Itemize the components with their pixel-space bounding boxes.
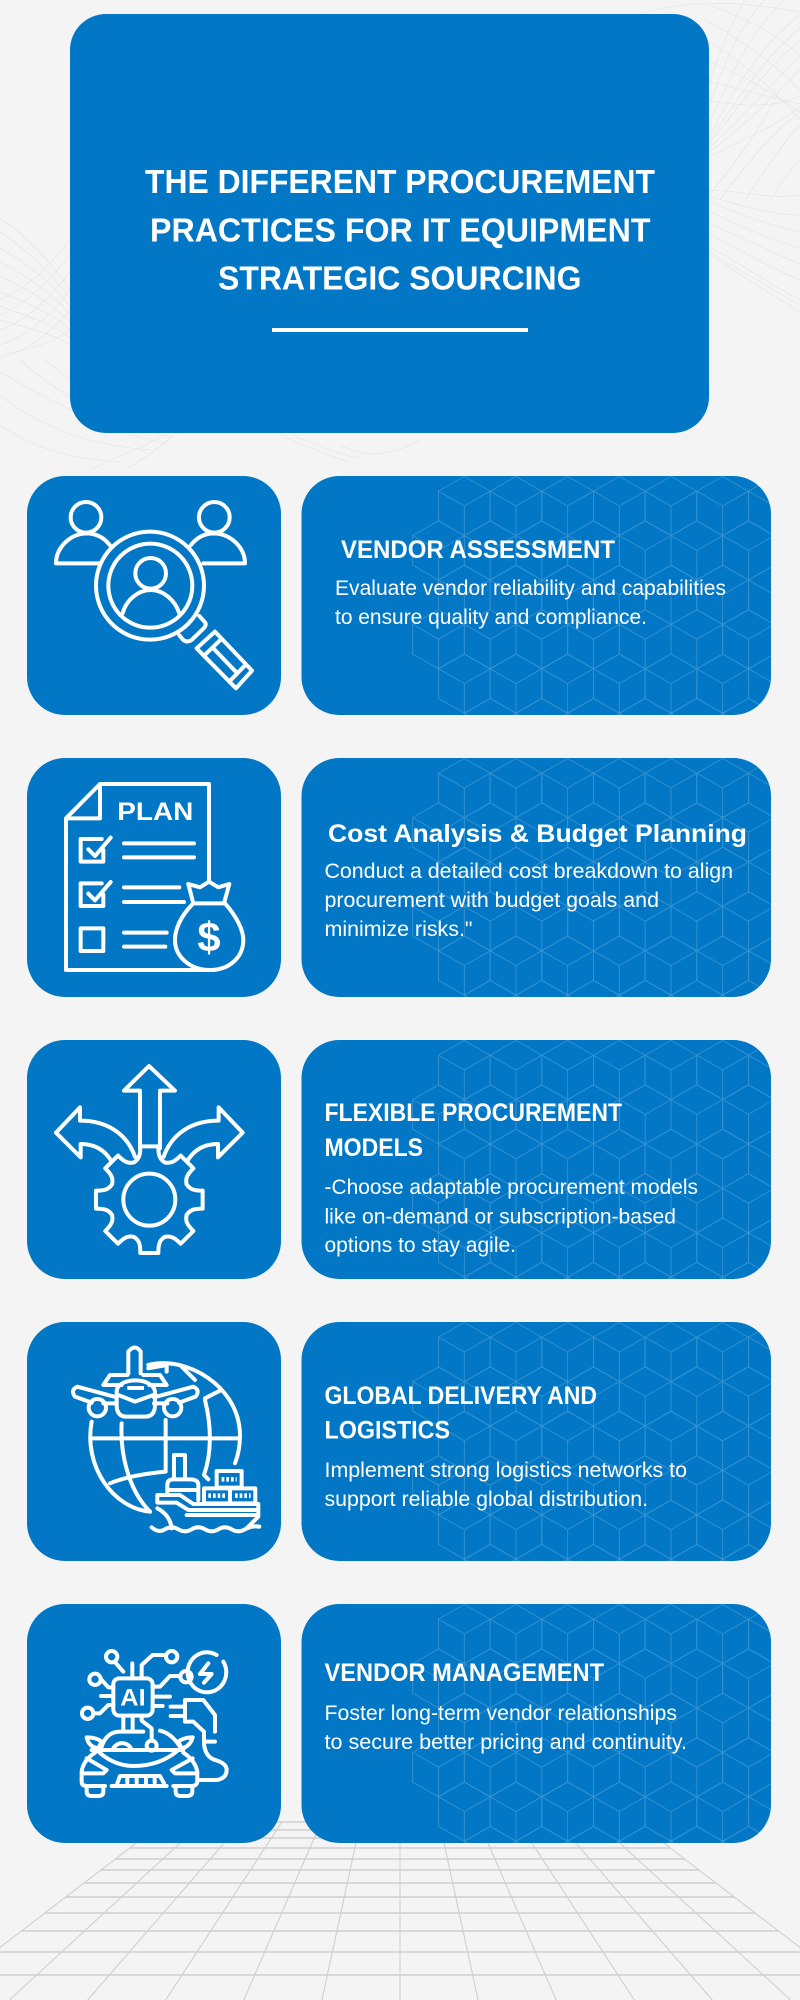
background wave pattern	[0, 0, 800, 470]
heading: flexible procurement models: MODELS	[324, 1134, 423, 1162]
icon: plan checklist with money bag: $	[197, 914, 221, 961]
text: vendor assessment description	[335, 577, 726, 629]
heading: flexible procurement models	[324, 1099, 622, 1162]
title: PRACTICES FOR IT EQUIPMENT	[150, 212, 650, 248]
title underline	[272, 328, 528, 332]
text: flexible procurement description: like on-demand or subscription-based	[324, 1206, 676, 1228]
perspective grid floor	[0, 1822, 800, 2000]
text: vendor assessment description: Evaluate vendor reliability and capabilities	[335, 577, 726, 600]
heading: global delivery and logistics: GLOBAL DELIVERY AND	[324, 1382, 597, 1410]
panel: flexible procurement icon card	[27, 1040, 281, 1279]
panel: vendor management text card	[302, 1604, 771, 1843]
panel: vendor assessment icon card	[27, 476, 281, 715]
text: vendor assessment description: to ensure quality and compliance.	[335, 606, 647, 629]
heading: global delivery and logistics	[324, 1382, 597, 1444]
text: cost analysis description	[324, 860, 733, 941]
text: flexible procurement description: -Choose adaptable procurement models	[324, 1176, 698, 1199]
panel: global delivery text card	[302, 1322, 771, 1561]
text: flexible procurement description	[324, 1176, 698, 1257]
panel: flexible procurement text card	[302, 1040, 771, 1279]
title: THE DIFFERENT PROCUREMENT	[145, 163, 655, 200]
text: global delivery description: support reliable global distribution.	[324, 1488, 648, 1511]
text: cost analysis description: Conduct a detailed cost breakdown to align	[324, 860, 733, 883]
panel: vendor management icon card	[27, 1604, 281, 1843]
text: cost analysis description: minimize risks."	[324, 918, 472, 941]
title: STRATEGIC SOURCING	[218, 260, 582, 296]
icon: AI chip and electric car: AI	[120, 1684, 146, 1711]
panel: cost analysis icon card	[27, 758, 281, 997]
text: vendor management description: to secure better pricing and continuity.	[324, 1731, 687, 1754]
panel: title card	[70, 14, 709, 433]
panel: vendor assessment text card	[302, 476, 771, 715]
icon: magnifier over people	[56, 502, 252, 688]
text: vendor management description	[324, 1702, 687, 1754]
heading: cost analysis: Cost Analysis & Budget Planning	[328, 820, 747, 848]
text: global delivery description	[324, 1459, 687, 1511]
title	[145, 163, 655, 296]
icon: plane, globe and cargo ship	[73, 1347, 259, 1531]
icon: gear with three arrows	[56, 1066, 243, 1253]
text: cost analysis description: procurement with budget goals and	[324, 889, 659, 912]
panel: cost analysis text card	[302, 758, 771, 997]
text: vendor management description: Foster long-term vendor relationships	[324, 1702, 677, 1725]
text: global delivery description: Implement strong logistics networks to	[324, 1459, 687, 1482]
icon: plan checklist with money bag	[66, 784, 243, 970]
heading: vendor assessment: VENDOR ASSESSMENT	[341, 536, 615, 564]
heading: global delivery and logistics: LOGISTICS	[324, 1416, 450, 1444]
heading: flexible procurement models: FLEXIBLE PROCUREMENT	[324, 1099, 622, 1127]
heading: vendor management: VENDOR MANAGEMENT	[324, 1659, 604, 1687]
panel: global delivery icon card	[27, 1322, 281, 1561]
icon: plan checklist with money bag: PLAN	[117, 798, 193, 826]
text: flexible procurement description: options to stay agile.	[324, 1234, 516, 1257]
icon: AI chip and electric car	[82, 1651, 227, 1796]
